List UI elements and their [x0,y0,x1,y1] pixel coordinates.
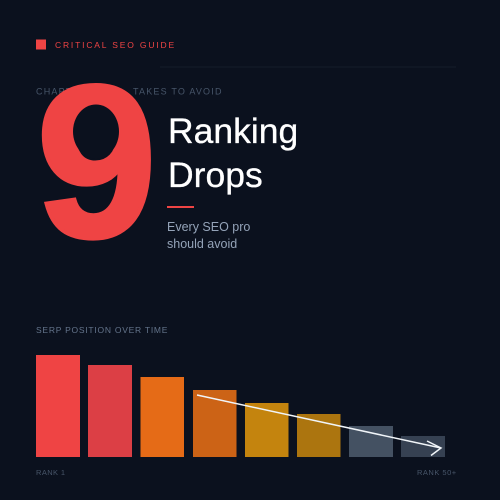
eyebrow label: CRITICAL SEO GUIDE [55,40,176,50]
description: should avoid [167,237,237,251]
axis label end: RANK 50+ [417,468,457,477]
trend arrow [197,395,441,456]
chart heading: SERP POSITION OVER TIME [36,325,168,335]
title [168,111,298,195]
title: Drops [168,155,263,195]
subtitle: TAKES TO AVOID [133,86,223,96]
subtitle: CHAPTER: MIS [36,86,114,96]
description [167,220,250,251]
accent line [167,206,194,208]
header tag [36,40,176,50]
icon: red square [36,40,46,50]
title: Ranking [168,111,298,151]
axis label start: RANK 1 [36,468,66,477]
bar chart [36,355,445,457]
description: Every SEO pro [167,220,250,234]
big number 9: 9 [36,40,157,282]
